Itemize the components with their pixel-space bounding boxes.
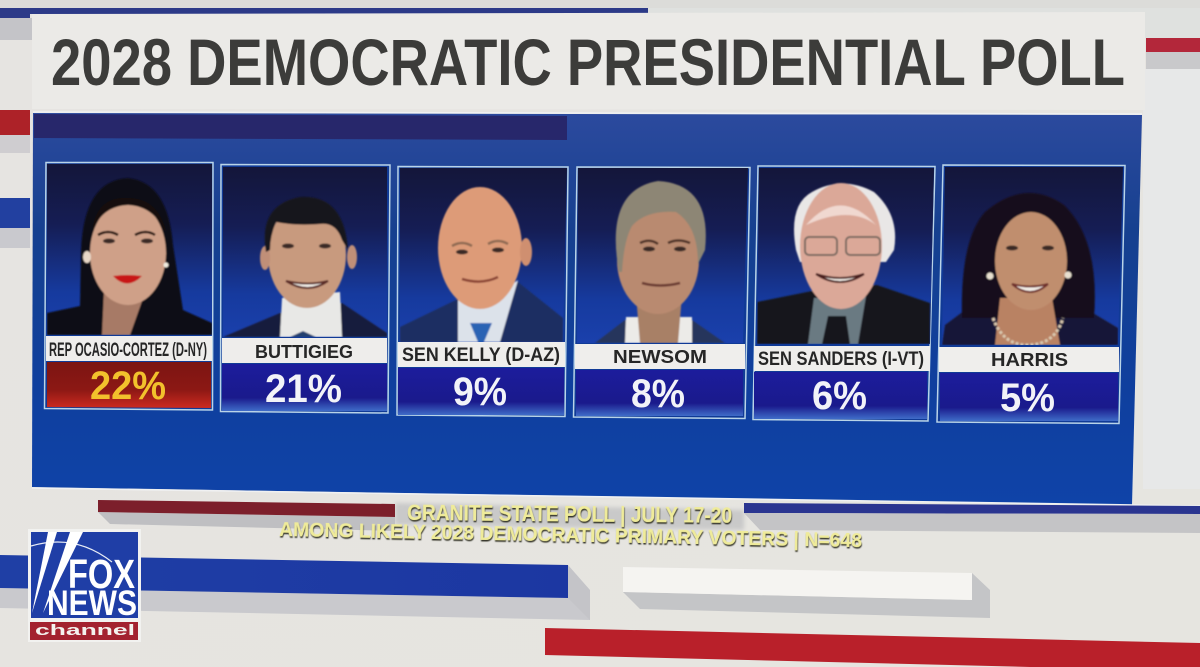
name label — [46, 336, 212, 361]
candidate card: Sanders — [753, 166, 935, 421]
name label: SEN SANDERS (I-VT) — [758, 349, 924, 370]
logo: Fox News Channel: FOX — [68, 551, 135, 597]
name label: BUTTIGIEG — [255, 342, 353, 362]
percentage: 9%: 9% — [453, 370, 507, 414]
percentage: 21% — [222, 364, 387, 411]
portrait: Buttigieg — [223, 167, 387, 337]
portrait: Ocasio-Cortez — [47, 164, 212, 335]
name label: NEWSOM — [613, 347, 707, 367]
name label — [222, 338, 387, 363]
title banner — [32, 12, 1145, 110]
percentage: 22%: 22% — [90, 364, 166, 408]
portrait: Newsom — [577, 168, 748, 343]
panel: blue poll board — [32, 112, 1200, 506]
portrait: Harris — [942, 167, 1123, 345]
percentage: 8%: 8% — [631, 372, 685, 416]
candidate card: Ocasio-Cortez — [44, 162, 213, 410]
name label — [575, 344, 745, 369]
lower background stripes — [0, 500, 1200, 667]
name label: HARRIS — [991, 350, 1068, 370]
logo: Fox News Channel — [28, 529, 141, 642]
footnote: source: AMONG LIKELY 2028 DEMOCRATIC PRIMARY VOTERS | N=648 — [279, 519, 862, 552]
percentage: 9% — [398, 368, 564, 415]
candidate card: Buttigieg — [220, 164, 390, 413]
left background stripes — [0, 110, 30, 248]
candidate card: Kelly — [397, 166, 568, 416]
percentage: 8% — [576, 370, 743, 416]
footnote: source: GRANITE STATE POLL | JULY 17-20 — [407, 500, 732, 528]
footnote: source — [279, 500, 862, 552]
percentage: 5% — [940, 373, 1118, 421]
name label: SEN KELLY (D-AZ) — [402, 345, 560, 366]
percentage: 21%: 21% — [265, 367, 342, 411]
percentage: 6% — [754, 372, 927, 419]
name label — [939, 347, 1119, 372]
logo: Fox News Channel: NEWS — [47, 584, 137, 623]
portrait: Sanders — [757, 168, 934, 344]
logo: Fox News Channel: channel — [35, 622, 135, 639]
percentage: 6%: 6% — [812, 374, 867, 418]
percentage: 22% — [47, 362, 211, 408]
portrait: Kelly — [400, 168, 567, 342]
name label: REP OCASIO-CORTEZ (D-NY) — [49, 340, 207, 361]
candidate card: Newsom — [574, 167, 750, 418]
percentage: 5%: 5% — [1000, 376, 1055, 420]
candidate card: Harris — [937, 165, 1125, 424]
top background stripes — [0, 0, 1200, 489]
